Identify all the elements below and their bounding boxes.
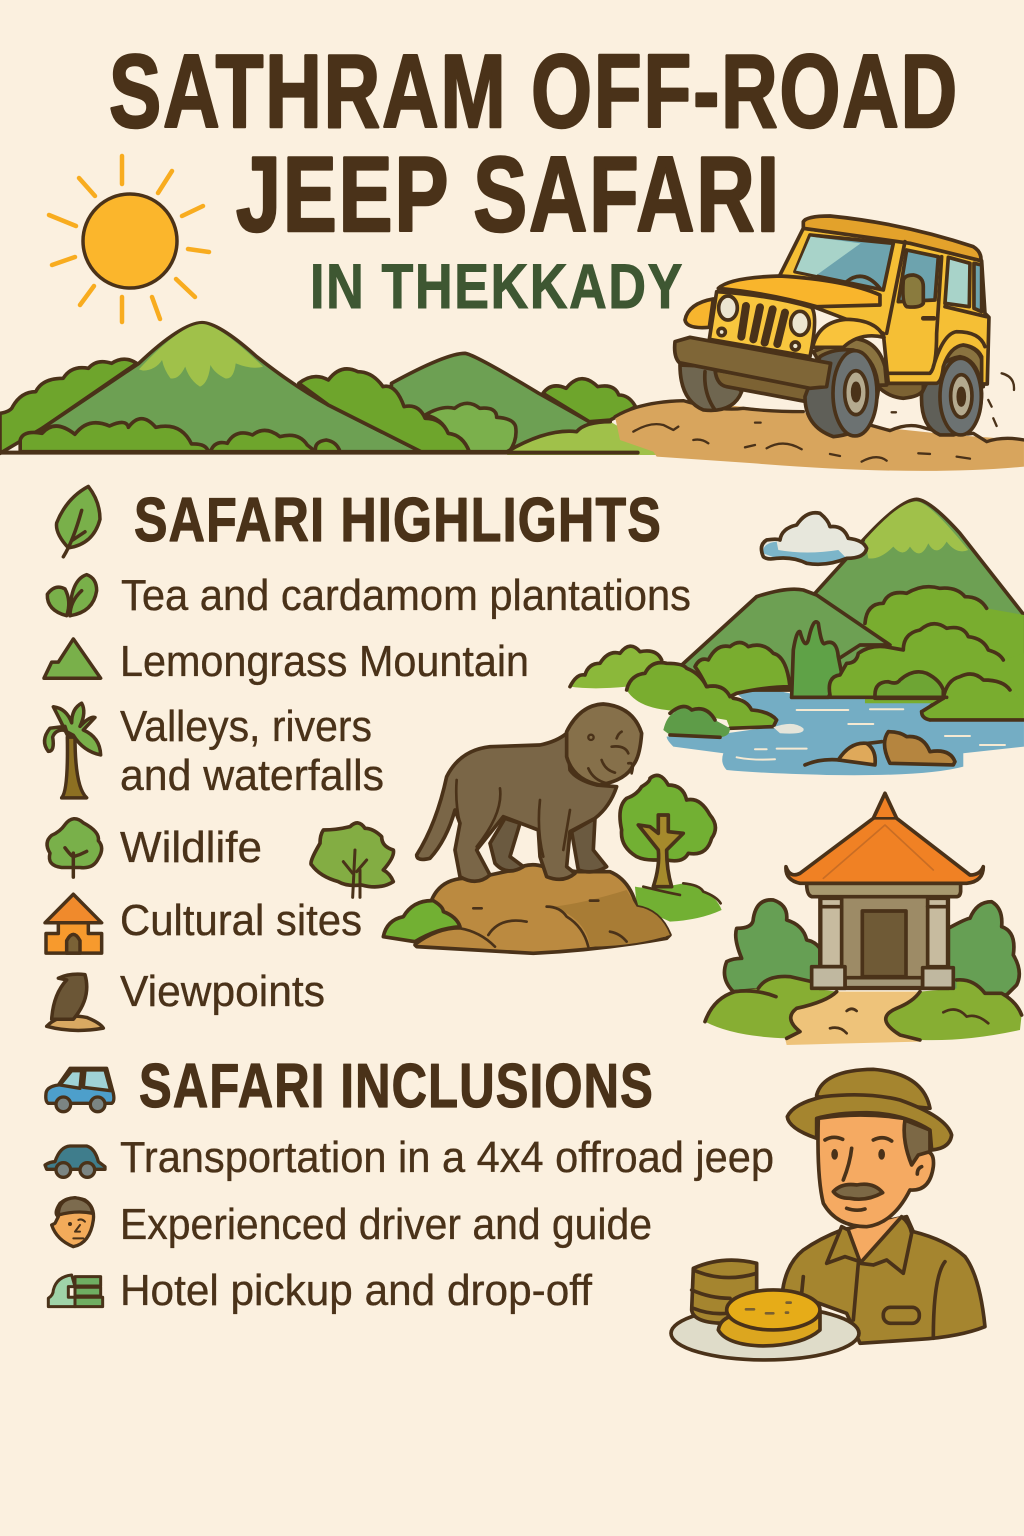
far front tire — [680, 365, 742, 410]
bushes — [865, 587, 1024, 703]
hills landscape — [0, 323, 657, 455]
title: IN THEKKADY — [310, 252, 684, 322]
item: transportation: Transportation in a 4x4 offroad jeep — [120, 1133, 774, 1182]
collar — [827, 1227, 860, 1263]
item: driver and guide: Experienced driver and guide — [120, 1200, 652, 1249]
jeep front fender — [813, 319, 884, 347]
item: cultural sites — [45, 894, 362, 953]
jeep hood — [718, 276, 880, 307]
item: valleys rivers and waterfalls: and waterfalls — [120, 751, 384, 800]
title: JEEP SAFARI — [236, 134, 781, 254]
jeep windows — [795, 235, 987, 373]
heading: safari inclusions: SAFARI INCLUSIONS — [139, 1052, 654, 1121]
stacked food — [692, 1260, 757, 1323]
item: cultural sites: Cultural sites — [120, 896, 362, 945]
title — [109, 34, 959, 322]
icon: blue car — [46, 1068, 114, 1112]
small tree — [311, 823, 394, 897]
flatbread — [718, 1313, 820, 1346]
river — [667, 690, 1024, 775]
tree — [620, 775, 722, 922]
jeep undercarriage — [715, 370, 923, 402]
illustration: temple — [705, 793, 1022, 1045]
plate — [671, 1307, 859, 1360]
illustration: guide with food — [671, 1069, 985, 1360]
rocks — [773, 724, 955, 765]
item: lemongrass mountain: Lemongrass Mountain — [120, 637, 529, 686]
item: wildlife: Wildlife — [120, 823, 262, 872]
jeep rear wheel — [922, 345, 983, 435]
landscape illustration: mountains and river — [570, 499, 1024, 775]
icon: sun — [49, 156, 209, 322]
animal — [417, 704, 642, 881]
jeep front wheel — [805, 338, 887, 437]
sand road — [615, 373, 1024, 471]
icon: leaf — [56, 486, 100, 557]
cloud — [761, 513, 867, 564]
jeep — [675, 216, 989, 437]
illustration: animal on rock with trees — [311, 704, 722, 953]
rock mound — [383, 865, 670, 953]
item: valleys rivers and waterfalls — [45, 702, 384, 800]
hat — [817, 1069, 930, 1108]
shirt — [783, 1217, 985, 1343]
jeep grille face — [685, 292, 815, 357]
item: viewpoints — [47, 967, 325, 1030]
item: wildlife — [47, 819, 262, 877]
jeep bumper — [675, 337, 831, 388]
item: tea and cardamom: Tea and cardamom plantations — [121, 571, 691, 620]
head — [818, 1115, 934, 1227]
heading: safari highlights: SAFARI HIGHLIGHTS — [134, 486, 662, 555]
jeep body — [780, 228, 989, 384]
item: valleys rivers and waterfalls: Valleys, rivers — [120, 702, 372, 751]
item: viewpoints: Viewpoints — [120, 967, 325, 1016]
face — [825, 1137, 922, 1210]
item: hotel pickup: Hotel pickup and drop-off — [120, 1266, 593, 1315]
jeep roof — [803, 216, 981, 261]
